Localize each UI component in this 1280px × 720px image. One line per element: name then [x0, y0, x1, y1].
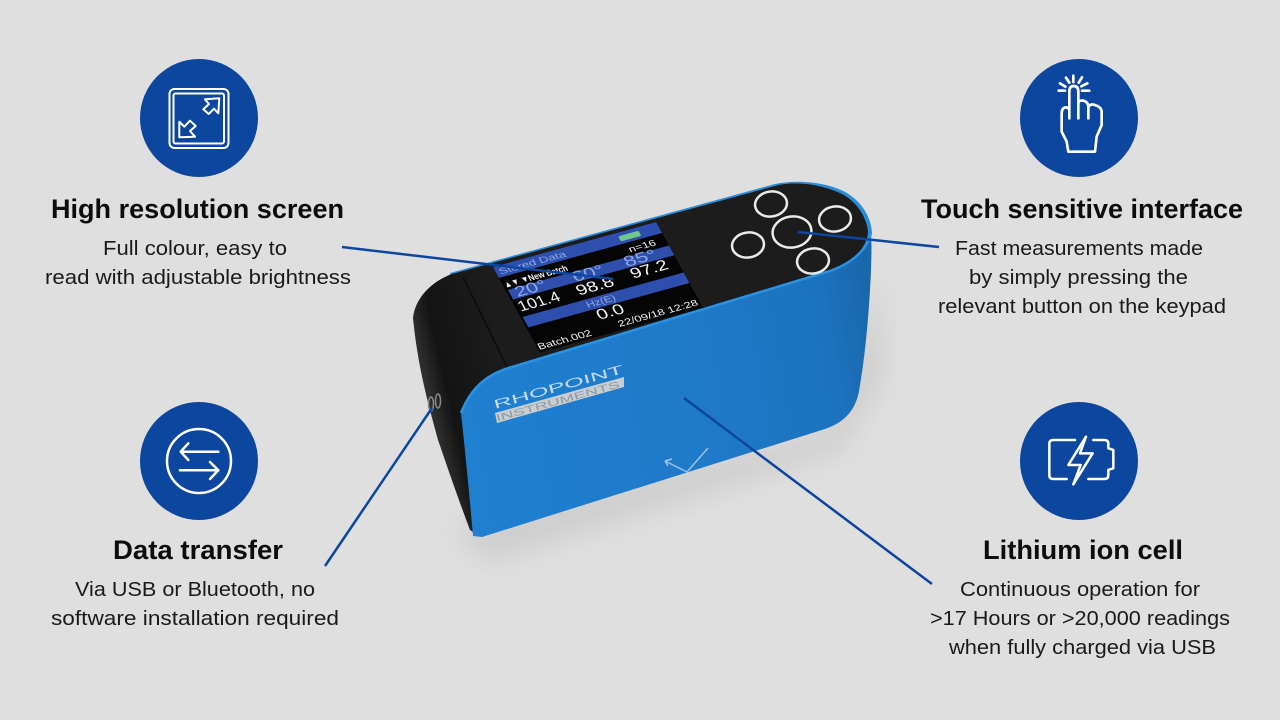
icon: touch hand — [1020, 59, 1138, 177]
connector: data port — [325, 408, 432, 566]
connector: screen — [342, 247, 613, 279]
icon: transfer arrows — [140, 402, 258, 520]
panel: high resolution screen — [45, 59, 351, 289]
device logo — [492, 362, 626, 424]
device screen: 60° — [569, 262, 608, 285]
device screen: 85° — [620, 247, 660, 270]
device screen — [493, 222, 703, 353]
device screen: 101.4 — [515, 289, 564, 315]
panel: lithium ion cell — [930, 402, 1230, 659]
device screen: n=16 — [627, 238, 658, 255]
device screen: Batch.002 — [536, 328, 594, 352]
text block — [930, 579, 1230, 659]
text block: when fully charged via USB — [948, 637, 1216, 659]
device buttons — [730, 189, 853, 276]
heading: Data transfer — [113, 535, 284, 565]
heading: Touch sensitive interface — [921, 194, 1243, 224]
connector: keypad — [798, 232, 939, 247]
panel: touch sensitive interface — [921, 59, 1243, 318]
device logo: INSTRUMENTS — [495, 379, 621, 424]
text block — [938, 238, 1226, 318]
heading: Lithium ion cell — [983, 535, 1183, 565]
icon: resize screen — [140, 59, 258, 177]
connector: battery — [684, 398, 932, 584]
text block: Continuous operation for — [960, 579, 1200, 601]
device screen: 0.0 — [593, 301, 628, 323]
device ports — [428, 394, 440, 411]
text block: software installation required — [51, 608, 339, 630]
text block: by simply pressing the — [969, 267, 1188, 289]
text block: Fast measurements made — [955, 238, 1203, 260]
text block — [51, 579, 339, 630]
text block: read with adjustable brightness — [45, 267, 351, 289]
panel: data transfer — [51, 402, 339, 630]
icon: charging battery — [1020, 402, 1138, 520]
text block — [45, 238, 351, 289]
text block: Full colour, easy to — [103, 238, 287, 260]
text block: >17 Hours or >20,000 readings — [930, 608, 1230, 630]
device logo: RHOPOINT — [492, 362, 626, 412]
device screen: 22/09/18 12:28 — [616, 298, 700, 329]
device screen: ▲▼ ▼New Batch — [502, 264, 570, 290]
text block: relevant button on the keypad — [938, 296, 1226, 318]
device screen: 20° — [511, 277, 550, 300]
device front face — [461, 233, 871, 537]
device screen: 97.2 — [627, 257, 672, 282]
device screen: 98.8 — [573, 274, 618, 299]
device: glossmeter — [413, 182, 880, 560]
device arrow mark — [665, 448, 708, 472]
device screen: Hz(E) — [584, 293, 618, 310]
text block: Via USB or Bluetooth, no — [75, 579, 315, 601]
device screen: Stored Data — [497, 249, 569, 277]
heading: High resolution screen — [51, 194, 344, 224]
